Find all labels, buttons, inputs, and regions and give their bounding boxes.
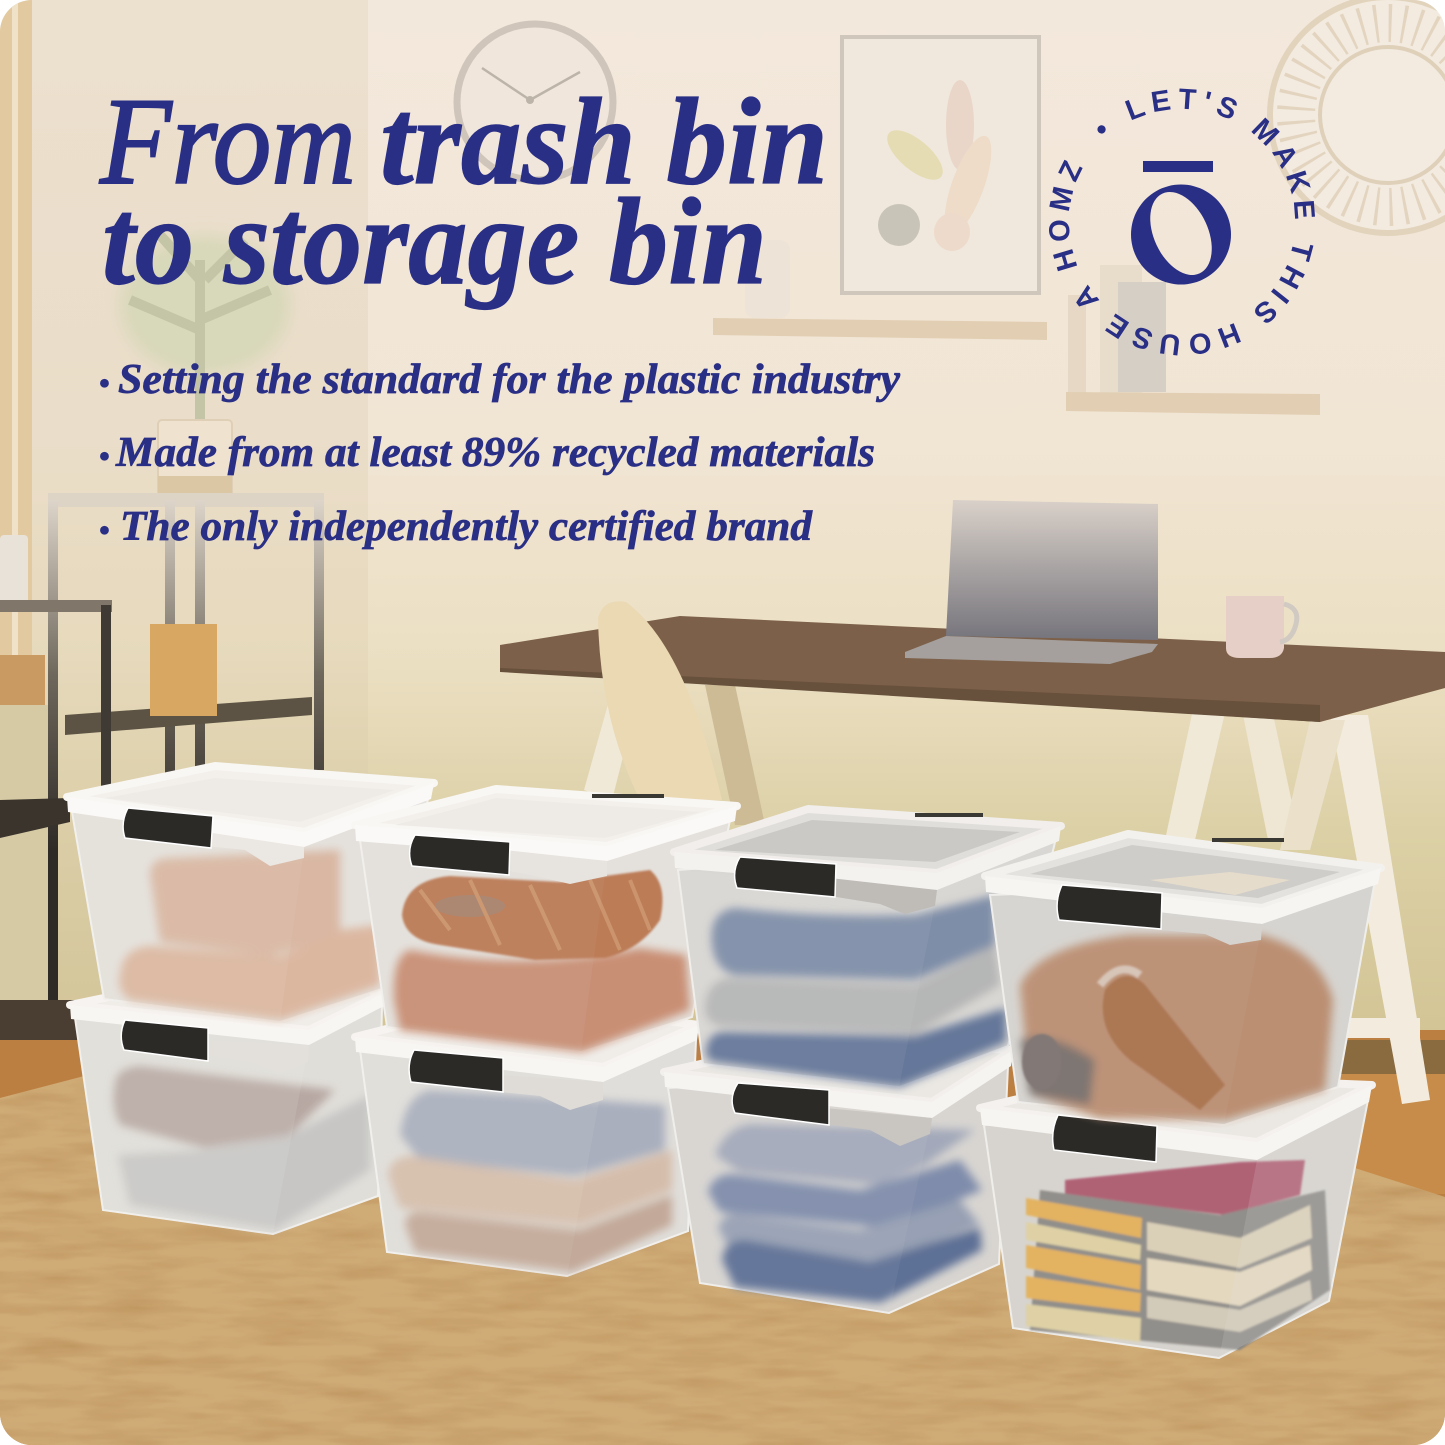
mug <box>1226 596 1297 658</box>
bullet list: • <box>99 440 110 473</box>
bullet list: Setting the standard for the plastic industry <box>118 357 900 403</box>
title <box>99 73 828 310</box>
bullet list <box>99 357 900 550</box>
rolled item in bin <box>1022 969 1225 1110</box>
storage bin: lower second <box>355 1000 699 1276</box>
title: trash bin <box>380 73 828 210</box>
bullet list: • <box>99 367 110 400</box>
bullet list: • <box>99 514 110 547</box>
chair <box>598 601 722 800</box>
storage bin: lower third <box>664 1040 1013 1313</box>
title: to storage bin <box>102 173 767 310</box>
storage bin: upper left <box>67 766 434 1022</box>
stacked books <box>1026 1160 1330 1350</box>
desk <box>500 616 1445 1104</box>
bullet list: The only independently certified brand <box>120 504 813 550</box>
title: From <box>99 73 356 210</box>
room background <box>0 0 1445 1110</box>
wicker mirror <box>1270 0 1445 233</box>
storage bin: lower right with books <box>980 1075 1372 1358</box>
storage bin: upper right <box>985 834 1381 1125</box>
clock <box>457 24 613 180</box>
brand logo badge: LET'S MAKE THIS HOUSE A HOMZ • <box>1049 88 1315 356</box>
plant and left shelving <box>0 235 324 1030</box>
floor <box>0 1000 1445 1445</box>
bullet list: Made from at least 89% recycled materials <box>115 430 875 476</box>
laptop <box>905 500 1158 664</box>
storage bin: upper second <box>355 789 737 1052</box>
framed art <box>842 37 1039 293</box>
rope-knit bundle <box>402 870 662 960</box>
storage bin: upper third <box>674 809 1061 1087</box>
wall shelves <box>713 265 1320 415</box>
storage bin: lower left <box>70 975 386 1234</box>
rug <box>0 1075 1445 1445</box>
